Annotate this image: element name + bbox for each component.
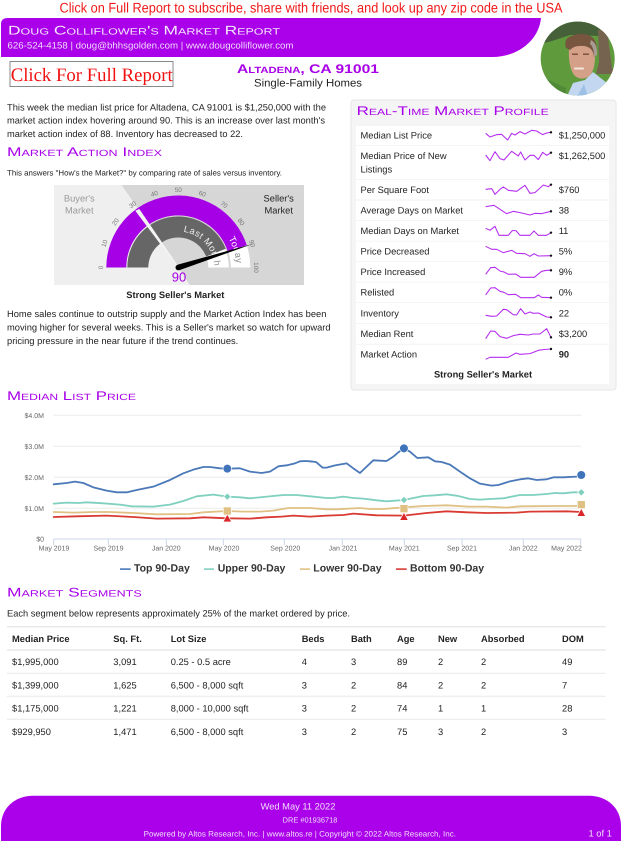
y axis labels: $4.0M [25, 412, 44, 420]
table row 2: 2 [438, 680, 443, 690]
row: inventory: Inventory [360, 308, 399, 318]
x axis labels: May 2020 [209, 546, 239, 552]
gauge last month label: Last Mont h [184, 226, 221, 266]
x axis labels: Jan 2020 [152, 546, 181, 552]
y axis labels: $2.0M [25, 474, 44, 482]
gauge tick labels: 80 [236, 217, 246, 227]
location heading: Altadena, CA 91001 [237, 62, 379, 76]
segments intro: Each segment below represents approximately 25% of the market ordered by price. [7, 609, 350, 619]
x axis labels: Sep 2019 [94, 546, 124, 552]
commentary paragraph: pricing pressure in the near future if the trend continues. [7, 336, 238, 346]
row: median price of new listings: Listings [360, 164, 392, 174]
table header: DOM [562, 634, 584, 644]
buyer's market label [64, 194, 95, 215]
row: price decreased: 5% [559, 247, 572, 257]
table row 1: 0.25 - 0.5 acre [171, 657, 231, 667]
table header [12, 634, 584, 644]
row: price decreased: Price Decreased [360, 247, 429, 257]
row: price increased: Price Increased [360, 267, 425, 277]
gauge today label: Today [230, 236, 241, 263]
table row 2: 3 [302, 680, 307, 690]
intro paragraph: This week the median list price for Altadena, CA 91001 is $1,250,000 with the [7, 102, 326, 112]
commentary paragraph: moving higher for several weeks. This is a Seller's market so watch for upward [7, 322, 331, 332]
table header: New [438, 634, 458, 644]
row: relisted: 0% [559, 288, 572, 298]
row: median list price: $1,250,000 [559, 130, 605, 140]
intro paragraph: market action index hovering around 90. This is an increase over last month's [7, 116, 325, 126]
chart legend: Top 90-Day [134, 562, 190, 574]
page number: 1 of 1 [588, 829, 612, 839]
x axis labels: May 2021 [389, 546, 420, 552]
agent photo [540, 21, 616, 97]
row: average days on market: 38 [559, 205, 569, 215]
row: median list price [356, 126, 609, 145]
table row 3: 2 [351, 704, 356, 714]
table row 1: 3 [351, 657, 356, 667]
table row 3: $1,175,000 [12, 704, 59, 714]
table row 2: 6,500 - 8,000 sqft [171, 680, 244, 690]
location heading [237, 62, 379, 90]
gauge caption: Strong Seller's Market [126, 290, 224, 300]
table row 3: 1,221 [113, 704, 137, 714]
chart legend: Upper 90-Day [218, 562, 286, 574]
row: relisted: Relisted [360, 288, 394, 298]
table row 4: $929,950 [12, 727, 51, 737]
row: median days on market: Median Days on Market [360, 226, 459, 236]
top call to action: Click on Full Report to subscribe, share with friends, and look up any zip code in the USA [60, 0, 563, 16]
table row 2: 2 [481, 680, 486, 690]
table header: Bath [351, 634, 372, 644]
table row 1: 49 [562, 657, 572, 667]
row: inventory: 22 [559, 308, 569, 318]
seller's market label [264, 194, 294, 215]
intro paragraph [7, 102, 326, 139]
table row 4: 3 [302, 727, 307, 737]
contact line: 626-524-4158 | doug@bhhsgolden.com | www.dougcolliflower.com [8, 41, 294, 51]
footer licence: DRE #01936718 [283, 816, 337, 825]
table row 1: 2 [481, 657, 486, 667]
table row 4: 3 [562, 727, 567, 737]
y axis labels [25, 412, 44, 544]
row: median rent: $3,200 [559, 329, 587, 339]
gauge tick labels: 0 [98, 265, 105, 269]
table row 3: 1 [438, 704, 443, 714]
buyer's market label: Buyer's [64, 194, 95, 204]
row: median price of new listings: $1,262,500 [559, 151, 605, 161]
table row 1 [12, 657, 572, 667]
gauge value arc [106, 195, 247, 268]
line chart: median list price [25, 412, 586, 574]
chart legend [120, 562, 484, 574]
x axis labels: Sep 2021 [447, 546, 477, 552]
chart legend: Lower 90-Day [313, 562, 382, 574]
table row 3: 3 [302, 704, 307, 714]
footer [1, 796, 621, 841]
gauge tick labels [98, 187, 259, 273]
table header: Lot Size [171, 634, 206, 644]
row: median price of new listings: Median Price of New [360, 151, 447, 161]
row: inventory [356, 303, 609, 323]
row: price decreased [356, 242, 609, 261]
x axis labels [39, 546, 582, 552]
table row 3: 1 [481, 704, 486, 714]
gauge tick labels: 70 [219, 200, 229, 210]
table row 2: 1,625 [113, 680, 137, 690]
row: median price of new listings [356, 146, 609, 179]
table header: Beds [302, 634, 325, 644]
row: market action [356, 345, 609, 384]
series: top 90-day [54, 444, 586, 492]
table row 2 [12, 680, 567, 690]
x axis labels: Jan 2021 [329, 546, 358, 552]
table row 3: 8,000 - 10,000 sqft [171, 704, 249, 714]
table header: Median Price [12, 634, 70, 644]
table row 1: $1,995,000 [12, 657, 59, 667]
gauge value: 90 [172, 270, 186, 285]
gauge tick labels: 10 [101, 239, 110, 248]
x axis labels: May 2019 [39, 546, 69, 552]
row: per square foot: Per Square Foot [360, 185, 429, 195]
seller's market label: Seller's [264, 194, 294, 204]
row: median rent [356, 324, 609, 344]
y axis labels: $3.0M [25, 443, 44, 451]
header banner [1, 18, 541, 57]
table row 2: 7 [562, 680, 567, 690]
gauge tick labels: 50 [175, 187, 182, 194]
row: market action: Strong Seller's Market [434, 369, 532, 379]
table row 4 [12, 727, 567, 737]
row: per square foot: $760 [559, 185, 579, 195]
y axis labels: $0 [36, 536, 44, 544]
table row 3: 74 [397, 704, 407, 714]
commentary paragraph: Home sales continue to outstrip supply and the Market Action Index has been [7, 309, 326, 319]
row: average days on market [356, 201, 609, 220]
series: lower 90-day [54, 501, 585, 515]
row: market action: 90 [559, 349, 569, 359]
table row 1: 3,091 [113, 657, 137, 667]
report title: Doug Colliflower's Market Report [8, 24, 281, 38]
table header: Sq. Ft. [113, 634, 142, 644]
table row 1: 2 [438, 657, 443, 667]
table row 1: 89 [397, 657, 407, 667]
row: average days on market: Average Days on Market [360, 205, 463, 215]
series: upper 90-day [54, 489, 585, 507]
table: market segments [7, 627, 606, 737]
row: median days on market [356, 221, 609, 241]
full report link box: Click For Full Report [11, 65, 173, 86]
table row 4: 6,500 - 8,000 sqft [171, 727, 244, 737]
series: bottom 90-day [54, 508, 586, 522]
gauge last month arc [127, 217, 226, 268]
table header: Age [397, 634, 415, 644]
heading: market segments: Market Segments [7, 586, 142, 600]
x axis labels: Sep 2020 [270, 546, 300, 552]
intro paragraph: market action index of 88. Inventory has decreased to 22. [7, 129, 243, 139]
gauge tick labels: 30 [128, 200, 138, 210]
row: per square foot [356, 180, 609, 199]
commentary paragraph [7, 309, 331, 346]
table row 4: 2 [351, 727, 356, 737]
table header: Absorbed [481, 634, 525, 644]
gauge tick labels: 60 [198, 190, 207, 199]
row: relisted [356, 283, 609, 302]
gauge tick labels: 90 [247, 239, 256, 249]
footer date: Wed May 11 2022 [261, 801, 335, 811]
table row 2: 84 [397, 680, 407, 690]
location heading: Single-Family Homes [254, 78, 363, 90]
table row 1: 4 [302, 657, 307, 667]
buyer's market label: Market [65, 205, 94, 215]
row: market action: Market Action [360, 349, 417, 359]
panel heading: Real-Time Market Profile [357, 104, 549, 118]
heading: market action index: Market Action Index [7, 145, 162, 159]
gauge needle [176, 244, 253, 270]
market action subtitle: This answers "How's the Market?" by comparing rate of sales versus inventory. [7, 168, 282, 177]
table row 4: 3 [438, 727, 443, 737]
row: median days on market: 11 [559, 226, 568, 236]
table row 3: 28 [562, 704, 572, 714]
row: median list price: Median List Price [360, 130, 432, 140]
chart legend: Bottom 90-Day [410, 562, 484, 574]
table row 3 [12, 704, 572, 714]
heading: median list price: Median List Price [7, 389, 136, 403]
panel: real-time market profile [351, 100, 616, 390]
row: median rent: Median Rent [360, 329, 414, 339]
table row 4: 1,471 [113, 727, 137, 737]
x axis labels: Jan 2022 [509, 546, 538, 552]
table row 2: $1,399,000 [12, 680, 59, 690]
gauge: market action index [54, 185, 304, 285]
x axis labels: May 2022 [551, 546, 582, 552]
row: price increased [356, 262, 609, 282]
gauge tick labels: 20 [111, 217, 121, 227]
gauge tick labels: 40 [150, 190, 159, 199]
table row 2: 2 [351, 680, 356, 690]
y axis labels: $1.0M [25, 505, 44, 513]
footer credits: Powered by Altos Research, Inc. | www.altos.re | Copyright © 2022 Altos Research, Inc. [144, 830, 456, 839]
gauge tick labels: 100 [252, 262, 259, 273]
seller's market label: Market [264, 205, 293, 215]
row: price increased: 9% [559, 267, 572, 277]
table row 4: 2 [481, 727, 486, 737]
table row 4: 75 [397, 727, 407, 737]
